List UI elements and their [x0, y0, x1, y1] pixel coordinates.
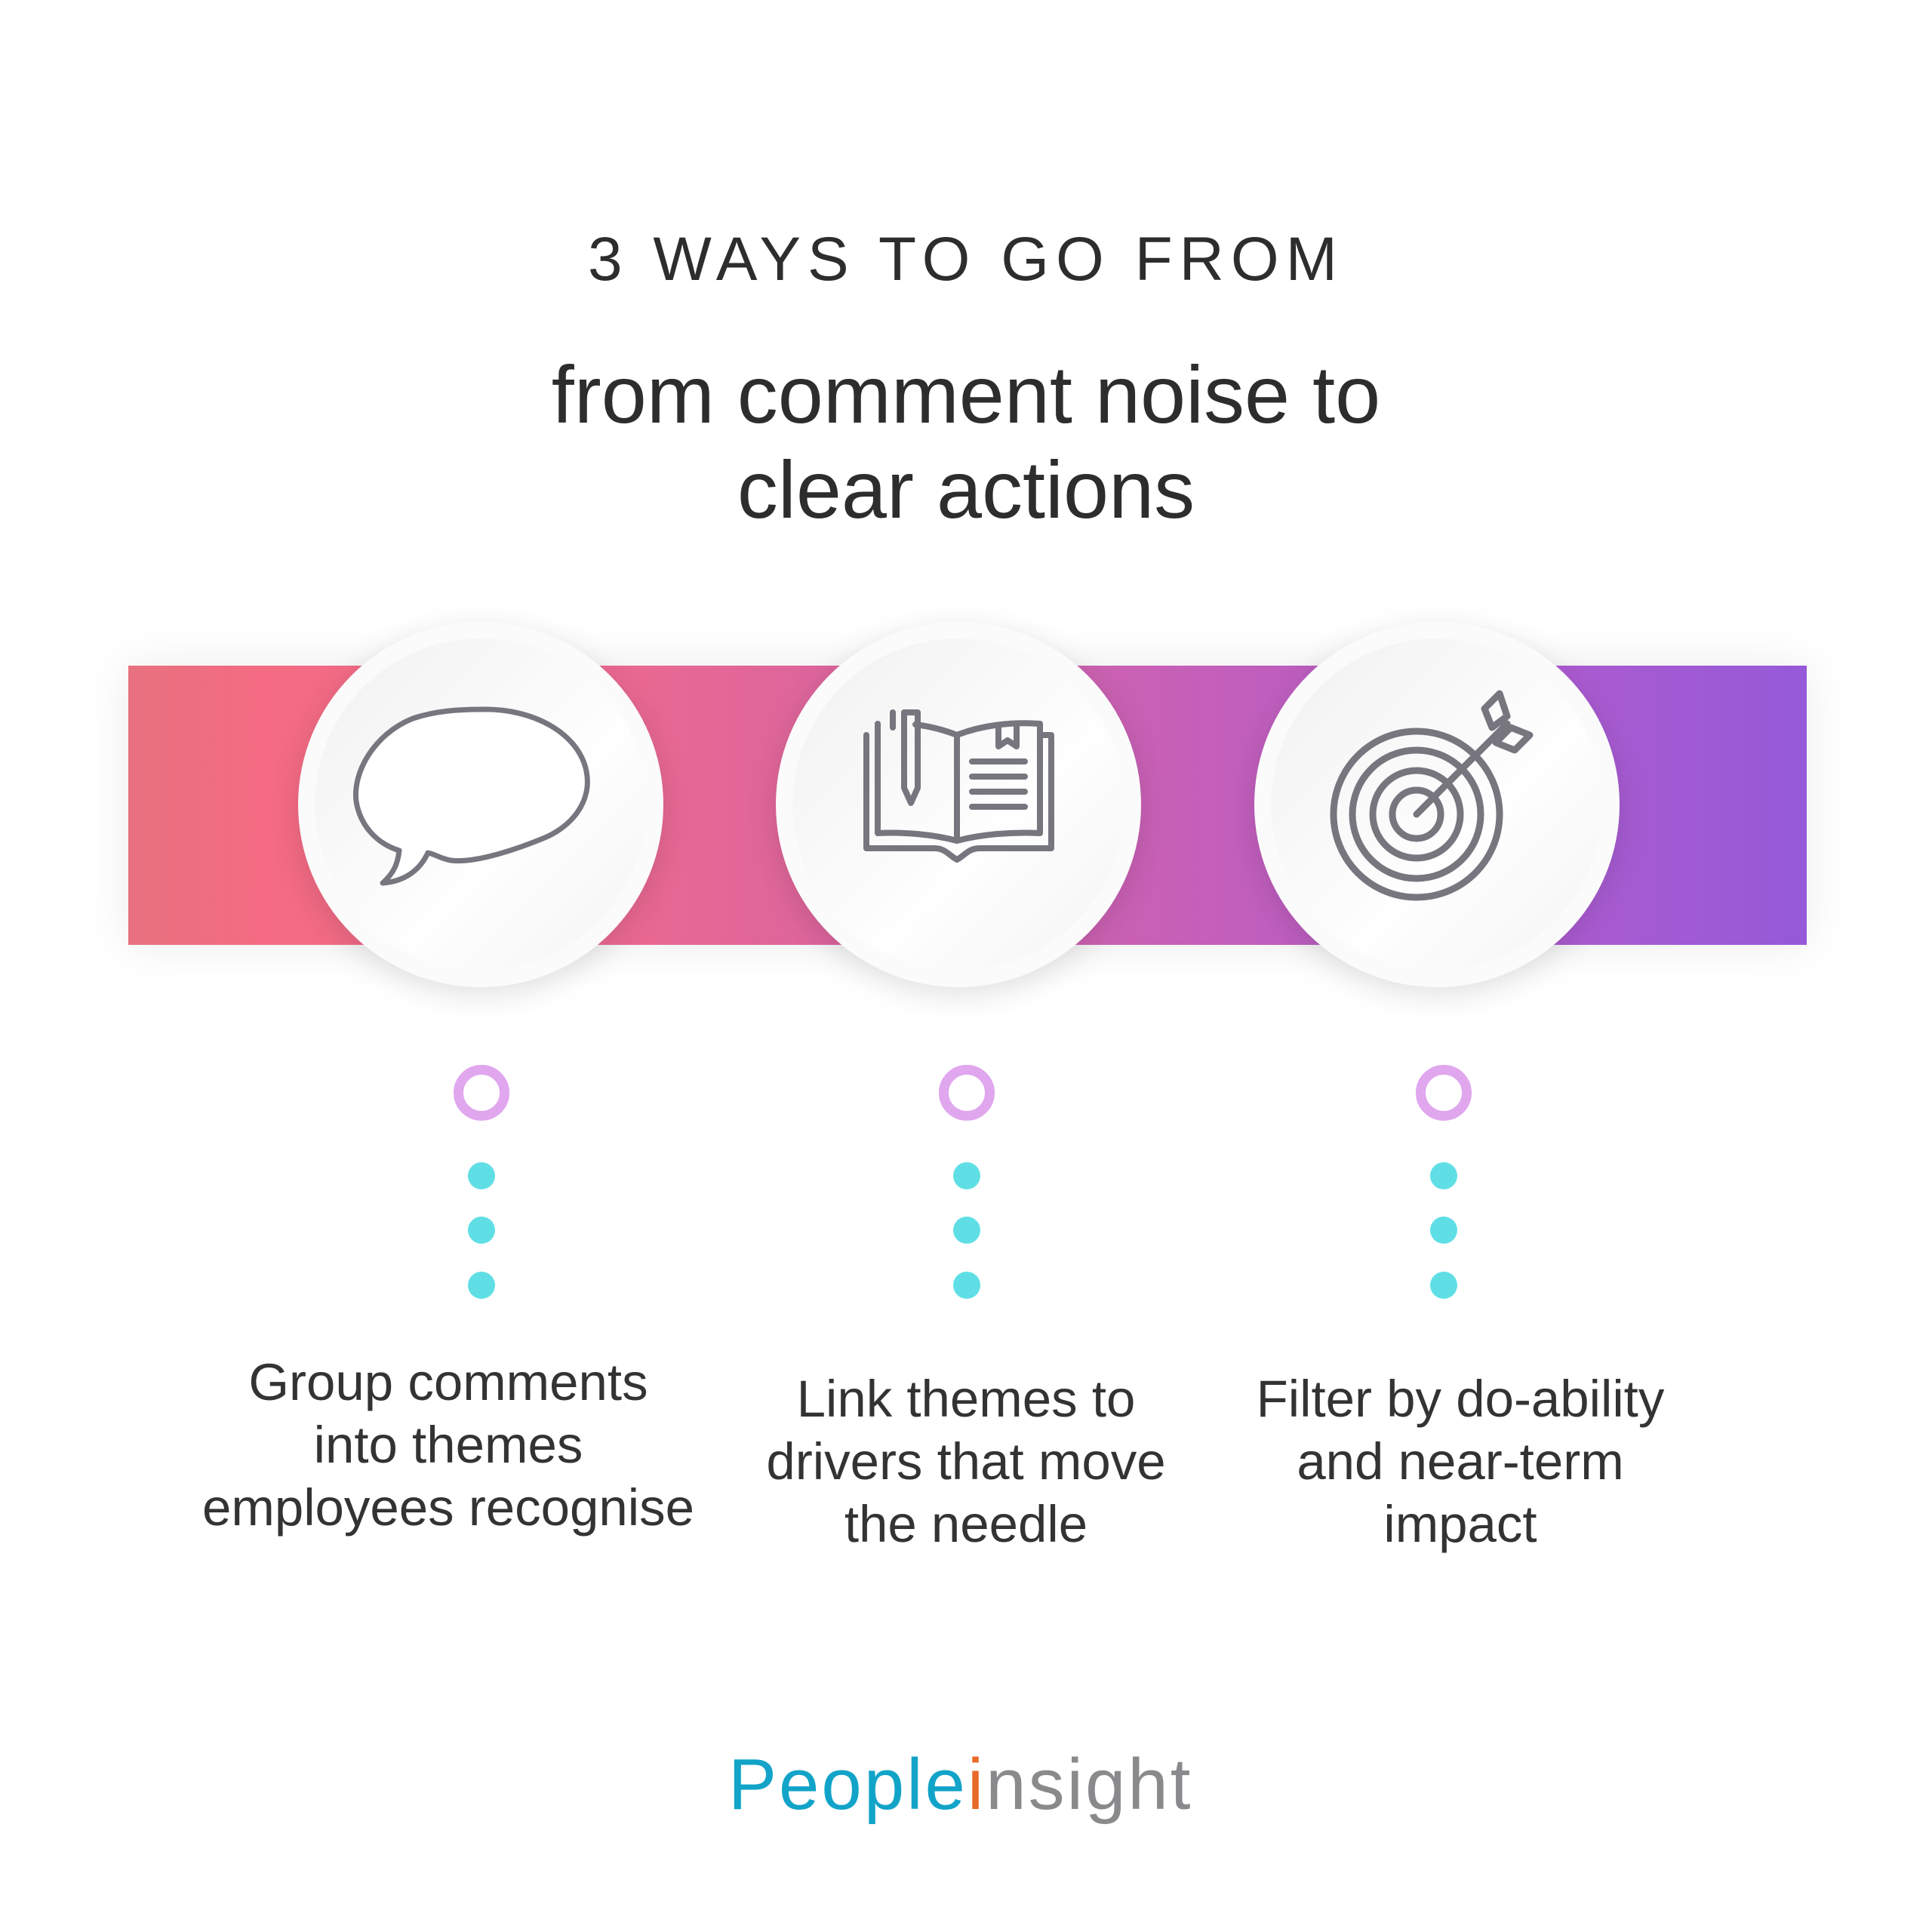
circle 2: book icon: [776, 622, 1141, 987]
text 3: Filter by do-ability: [1257, 1370, 1664, 1428]
icon: speech bubble: [353, 706, 590, 886]
step 2 connector: [939, 1065, 995, 1299]
subtitle: from comment noise to: [552, 349, 1380, 440]
step 3 connector: [1416, 1065, 1472, 1299]
circle 1: speech bubble: [298, 622, 663, 987]
text 1: Group comments: [248, 1353, 648, 1411]
text 1: employees recognise: [202, 1478, 694, 1537]
text 3: [1257, 1370, 1665, 1553]
icon: book with pen: [863, 709, 1054, 863]
text 1: into themes: [314, 1416, 583, 1474]
text 2: drivers that move: [766, 1432, 1166, 1491]
circle 3: target icon: [1254, 622, 1620, 987]
step 1 connector: [454, 1065, 509, 1299]
text 2: the needle: [844, 1495, 1088, 1553]
subtitle: clear actions: [737, 444, 1195, 535]
icon: target with arrow: [1330, 690, 1534, 901]
text 1: [202, 1353, 694, 1537]
logo: Peopleinsight: [728, 1744, 1192, 1825]
text 3: impact: [1383, 1495, 1537, 1553]
subtitle: [552, 349, 1380, 535]
text 2: Link themes to: [797, 1370, 1135, 1428]
text 3: and near-term: [1297, 1432, 1624, 1491]
gradient band: [128, 666, 1807, 945]
title: 3 WAYS TO GO FROM: [588, 225, 1344, 294]
text 2: [766, 1370, 1166, 1553]
